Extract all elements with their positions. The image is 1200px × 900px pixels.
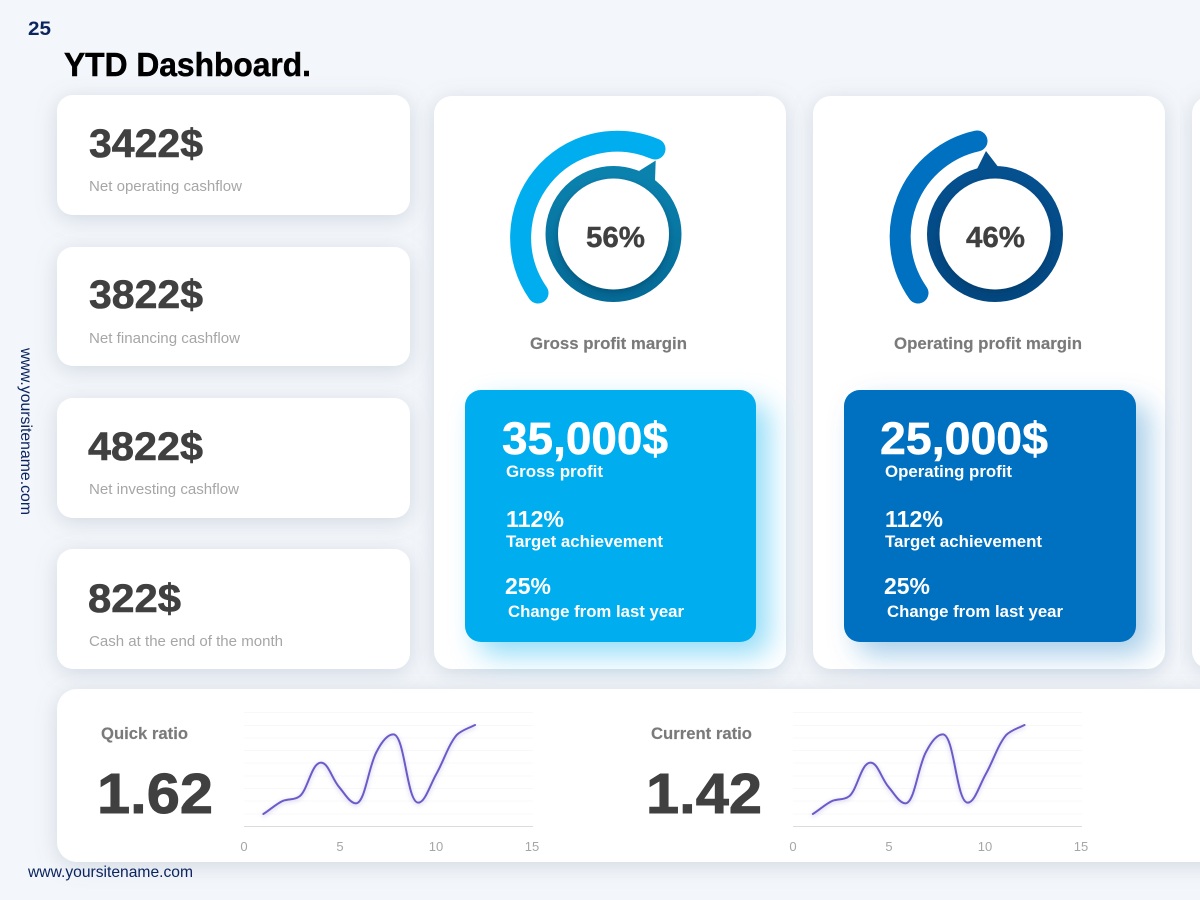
panel: net financing cashflow (57, 247, 410, 366)
current ratio value: 1.42 (646, 762, 762, 826)
panel: cash at end of month (57, 549, 410, 669)
label: Net operating cashflow (89, 178, 242, 195)
label: Net investing cashflow (89, 481, 239, 498)
title: YTD Dashboard. (64, 46, 311, 83)
gauge label: Gross profit margin (530, 334, 687, 353)
line chart: quick ratio: 5 (336, 839, 344, 854)
callout: gross profit stats: Target achievement (506, 532, 663, 551)
callout: gross profit stats: 25% (505, 573, 551, 599)
callout: gross profit stats: 112% (506, 506, 564, 532)
gauge label: Operating profit margin (894, 334, 1082, 353)
panel: gross profit (434, 96, 786, 669)
line chart: current ratio: 0 (789, 839, 797, 854)
page number: 25 (28, 19, 51, 40)
quick ratio label: Quick ratio (101, 724, 188, 743)
panel: net operating cashflow (57, 95, 410, 215)
line chart: quick ratio: 10 (429, 839, 443, 854)
footer website text: www.yoursitename.com (27, 864, 193, 881)
line chart: quick ratio: 0 (240, 839, 248, 854)
quick ratio value: 1.62 (97, 762, 213, 826)
line chart: current ratio: 10 (978, 839, 992, 854)
value: 4822$ (88, 425, 203, 469)
callout: operating profit stats: Change from last year (887, 602, 1063, 621)
panel: net investing cashflow (57, 398, 410, 518)
gauge: gross profit margin 56%: 56% (586, 222, 645, 254)
line chart: quick ratio (240, 712, 539, 854)
line chart: current ratio: 15 (1074, 839, 1088, 854)
callout: operating profit stats: 25% (884, 573, 930, 599)
line chart: current ratio: 5 (885, 839, 893, 854)
panel: cropped third column (1192, 96, 1200, 669)
callout: operating profit stats (844, 390, 1136, 642)
current ratio label: Current ratio (651, 724, 752, 743)
callout: operating profit stats: Operating profit (885, 462, 1012, 481)
gauge: operating profit margin 46%: 46% (966, 222, 1025, 254)
callout: operating profit stats: 25,000$ (880, 413, 1048, 464)
line chart: current ratio (789, 712, 1088, 854)
label: Cash at the end of the month (89, 633, 283, 650)
value: 3422$ (89, 122, 203, 166)
callout: gross profit stats (465, 390, 756, 642)
value: 3822$ (89, 273, 203, 317)
vertical website text: www.yoursitename.com (17, 347, 34, 515)
gauge: gross profit margin 56% (521, 141, 675, 296)
callout: gross profit stats: Change from last year (508, 602, 684, 621)
callout: gross profit stats: 35,000$ (502, 413, 668, 464)
line chart: quick ratio: 15 (525, 839, 539, 854)
gauge: operating profit margin 46% (900, 141, 1056, 296)
panel: ratios (57, 689, 1200, 862)
panel: operating profit (813, 96, 1165, 669)
callout: operating profit stats: 112% (885, 506, 943, 532)
label: Net financing cashflow (89, 330, 240, 347)
value: 822$ (88, 577, 181, 621)
callout: operating profit stats: Target achievement (885, 532, 1042, 551)
callout: gross profit stats: Gross profit (506, 462, 603, 481)
